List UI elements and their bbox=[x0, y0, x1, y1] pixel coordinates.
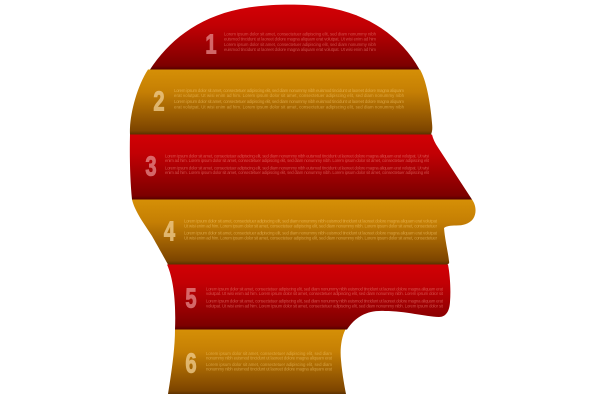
text block 2: Lorem ipsum dolor sit amet, consectetuer adipiscing elit, sed diam nonummy nibh euismod tincidunt ut laoreet dolore magna aliquam bbox=[174, 99, 404, 104]
text block 2: Lorem ipsum dolor sit amet, consectetuer adipiscing elit, sed diam nonummy nibh euismod tincidunt ut laoreet dolore magna aliquam bbox=[174, 88, 404, 93]
text block 1: euismod tincidunt ut laoreet dolore magna aliquam erat volutpat. Ut wisi enim ad him bbox=[224, 36, 376, 42]
number 3: 3 bbox=[145, 151, 157, 182]
text block 1: euismod tincidunt ut laoreet dolore magna aliquam erat volutpat. Ut wisi enim ad him bbox=[224, 47, 376, 52]
number 4: 4 bbox=[164, 216, 175, 247]
text block 6: Lorem ipsum dolor sit amet, consectetuer adipiscing elit, sed diam bbox=[206, 362, 332, 367]
band 5 bbox=[167, 264, 450, 330]
text block 6: Lorem ipsum dolor sit amet, consectetuer adipiscing elit, sed diam bbox=[206, 351, 332, 356]
text block 2: erat volutpat. Ut wisi enim ad him. Lorem ipsum dolor sit amet, consectetuer adipiscing elit, sed diam nonummy nibh bbox=[174, 93, 405, 98]
number 2: 2 bbox=[153, 86, 165, 117]
number 1: 1 bbox=[205, 29, 217, 60]
text block 1: Lorem ipsum dolor sit amet, consectetuer adipiscing elit, sed diam nonummy nibh bbox=[224, 42, 377, 47]
text block 2 bbox=[174, 88, 405, 110]
text block 4: Lorem ipsum dolor sit amet, consectetuer adipiscing elit, sed diam nonummy nibh euismod tincidunt ut laoreet dolore magna aliquam erat volutpat bbox=[184, 230, 438, 236]
text block 3: enim ad him. Lorem ipsum dolor sit amet, consectetuer adipiscing elit, sed diam nonummy nibh. Lorem ipsum dolor sit amet, consectetuer adipiscing elit bbox=[165, 170, 430, 175]
text block 4: Lorem ipsum dolor sit amet, consectetuer adipiscing elit, sed diam nonummy nibh euismod tincidunt ut laoreet dolore magna aliquam erat volutpat bbox=[184, 218, 438, 224]
text block 3: enim ad him. Lorem ipsum dolor sit amet, consectetuer adipiscing elit, sed diam nonummy nibh. Lorem ipsum dolor sit amet, consectetuer adipiscing elit bbox=[165, 158, 430, 163]
text block 5 bbox=[206, 286, 444, 308]
text block 2: erat volutpat. Ut wisi enim ad him. Lorem ipsum dolor sit amet, consectetuer adipiscing elit, sed diam nonummy nibh bbox=[174, 104, 405, 110]
text block 6: nonummy nibh euismod tincidunt ut laoreet dolore magna aliquam erat bbox=[206, 366, 333, 372]
text block 4: Ut wisi enim ad him. Lorem ipsum dolor sit amet, consectetuer adipiscing elit, sed diam nonummy nibh. Lorem ipsum dolor sit amet, consectetuer bbox=[184, 236, 438, 240]
text block 3: Lorem ipsum dolor sit amet, consectetuer adipiscing elit, sed diam nonummy nibh euismod tincidunt ut laoreet dolore magna aliquam erat volutpat. Ut wisi bbox=[165, 154, 429, 158]
band 1 bbox=[150, 5, 420, 69]
band 6 bbox=[168, 330, 346, 394]
band 4 bbox=[132, 200, 476, 264]
number 5: 5 bbox=[185, 283, 197, 314]
text block 3 bbox=[165, 154, 430, 175]
text block 5: Lorem ipsum dolor sit amet, consectetuer adipiscing elit, sed diam nonummy nibh euismod tincidunt ut laoreet dolore magna aliquam erat bbox=[206, 298, 444, 304]
text block 3: Lorem ipsum dolor sit amet, consectetuer adipiscing elit, sed diam nonummy nibh euismod tincidunt ut laoreet dolore magna aliquam erat volutpat. Ut wisi bbox=[165, 166, 429, 170]
band 3 bbox=[130, 134, 472, 200]
text block 1 bbox=[224, 32, 377, 52]
text block 4: Ut wisi enim ad him. Lorem ipsum dolor sit amet, consectetuer adipiscing elit, sed diam nonummy nibh. Lorem ipsum dolor sit amet, consectetuer bbox=[184, 224, 438, 228]
text block 5: volutpat. Ut wisi enim ad him. Lorem ipsum dolor sit amet, consectetuer adipiscing elit, sed diam nonummy nibh. Lorem ipsum dolor sit bbox=[206, 304, 444, 308]
band 2 bbox=[130, 70, 432, 134]
text block 5: volutpat. Ut wisi enim ad him. Lorem ipsum dolor sit amet, consectetuer adipiscing elit, sed diam nonummy nibh. Lorem ipsum dolor sit bbox=[206, 291, 444, 296]
text block 1: Lorem ipsum dolor sit amet, consectetuer adipiscing elit, sed diam nonummy nibh bbox=[224, 32, 377, 36]
text block 6: nonummy nibh euismod tincidunt ut laoreet dolore magna aliquam erat bbox=[206, 356, 333, 360]
number 6: 6 bbox=[185, 348, 197, 379]
text block 4 bbox=[184, 218, 438, 240]
text block 5: Lorem ipsum dolor sit amet, consectetuer adipiscing elit, sed diam nonummy nibh euismod tincidunt ut laoreet dolore magna aliquam erat bbox=[206, 286, 444, 292]
text block 6 bbox=[206, 351, 333, 372]
